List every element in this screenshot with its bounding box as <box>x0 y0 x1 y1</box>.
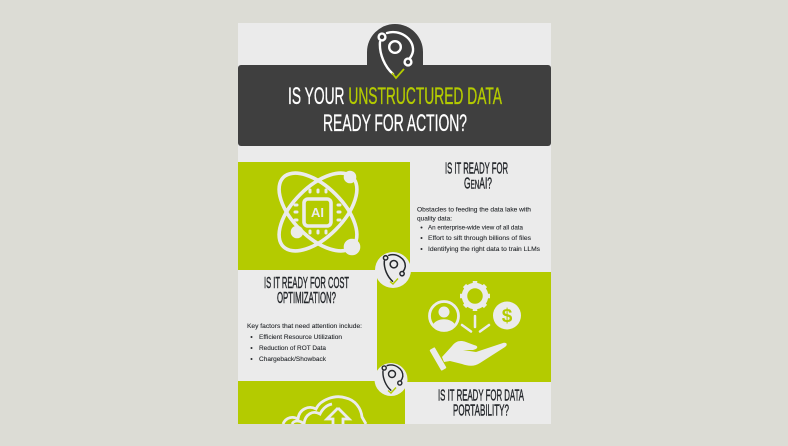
icon: open hand <box>429 341 507 371</box>
icon: rays <box>462 316 489 332</box>
text block: key factors: Efficient Resource Utilization <box>259 334 342 341</box>
icon: AI atom chip: AI <box>311 205 324 220</box>
title banner: READY FOR ACTION? <box>323 110 467 137</box>
panel: GenAI text: IS IT READY FOR <box>445 160 508 178</box>
icon: cloud upload <box>283 397 366 424</box>
icon: pin badge 1 <box>375 252 411 288</box>
panel: data portability heading: IS IT READY FOR DATA <box>438 388 524 404</box>
text block: key factors: Chargeback/Showback <box>259 356 327 363</box>
icon: dollar: $ <box>502 306 513 327</box>
panel: portability image <box>238 381 405 424</box>
heading: cost optimization: OPTIMIZATION? <box>277 290 336 307</box>
text block: key factors <box>247 323 362 363</box>
heading: cost optimization <box>264 276 349 304</box>
heading: GenAI: GENAI? <box>464 176 492 192</box>
panel: data portability heading: PORTABILITY? <box>453 402 509 420</box>
panel: data portability heading <box>438 389 524 416</box>
panel: GenAI image <box>238 160 410 270</box>
text block: obstacles: Obstacles to feeding the data lake with <box>417 206 531 214</box>
icon: person <box>430 302 458 330</box>
icon: dollar <box>493 302 521 330</box>
text block: key factors: Key factors that need attention include: <box>247 323 362 330</box>
panel: cost optimization text <box>247 275 362 363</box>
text block: obstacles: Effort to sift through billions of files <box>428 235 532 242</box>
icon: AI atom chip <box>277 170 360 256</box>
panel: cost optimization text: IS IT READY FOR COST <box>264 275 349 292</box>
text block: obstacles: quality data: <box>417 216 452 222</box>
title banner: IS YOUR UNSTRUCTURED DATA <box>288 83 502 110</box>
panel: cost image <box>377 272 551 382</box>
heading: GenAI <box>446 162 508 189</box>
text block: obstacles <box>417 206 541 253</box>
icon: gear <box>460 281 490 311</box>
page panel <box>238 23 551 424</box>
text block: key factors: Reduction of ROT Data <box>259 345 326 352</box>
text block: obstacles: An enterprise-wide view of all data <box>428 224 523 232</box>
icon: pin badge 2 <box>374 363 408 396</box>
title banner <box>238 24 551 146</box>
icon: header location pin <box>379 32 413 78</box>
text block: obstacles: Identifying the right data to train LLMs <box>428 246 541 253</box>
panel: GenAI text <box>417 160 541 253</box>
